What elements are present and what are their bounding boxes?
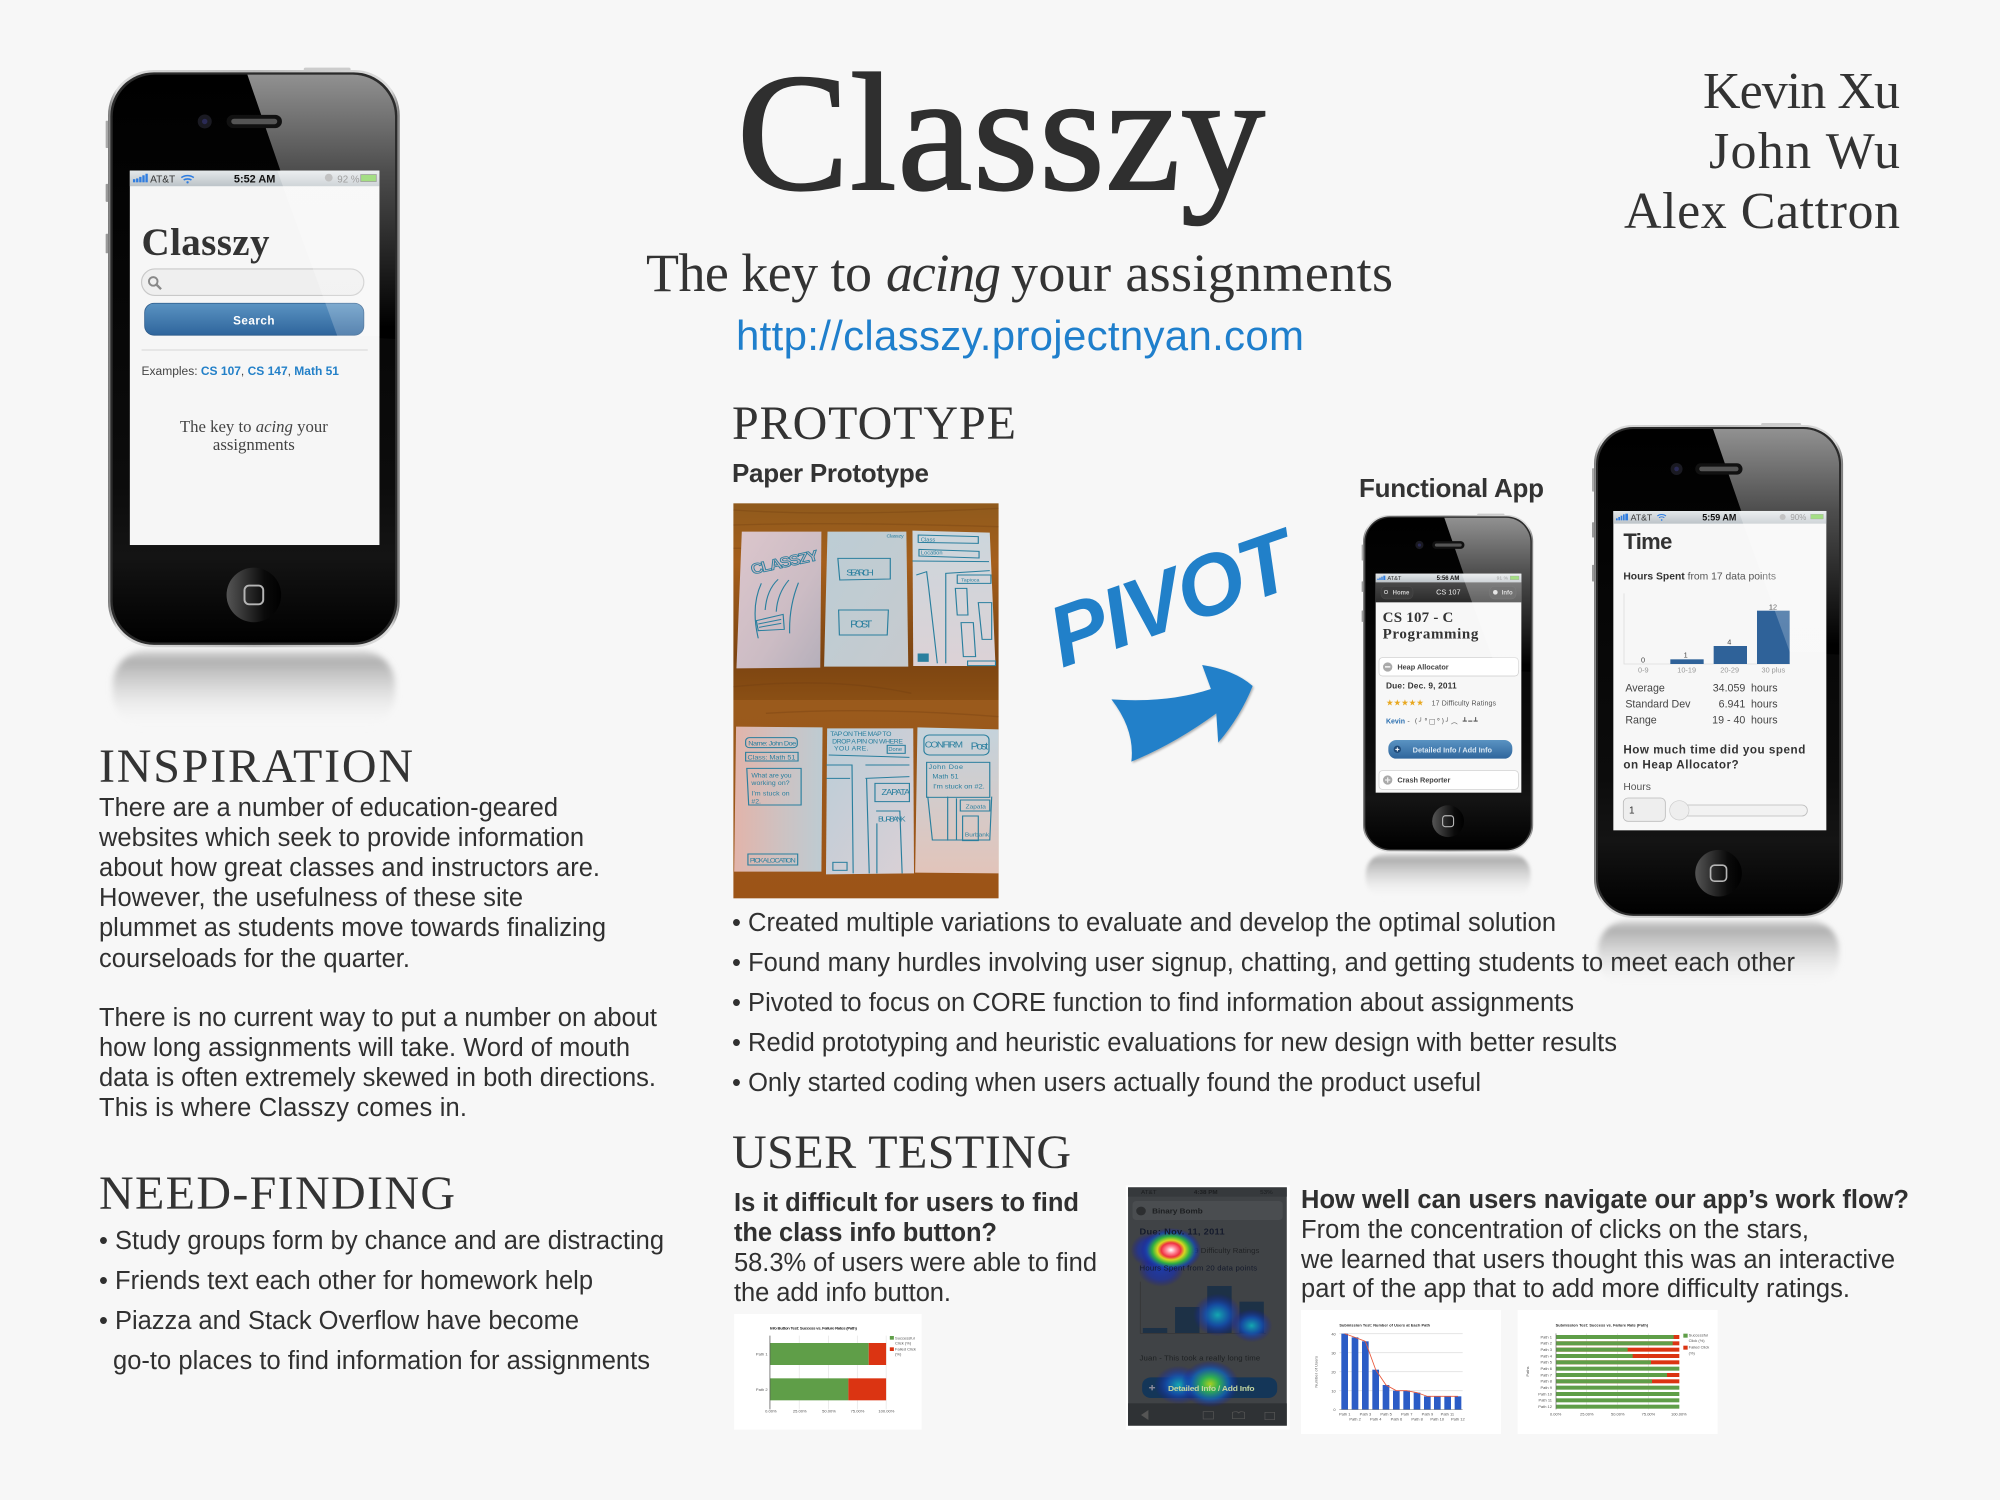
heatmap screenshot — [1126, 1185, 1290, 1430]
comment: Kevin — [1386, 718, 1405, 725]
heading: need-finding: NEED-FINDING — [99, 1167, 455, 1220]
chart: info button test: Path 1 — [756, 1352, 768, 1357]
nav bar — [1376, 582, 1521, 602]
stats table: 19 - 40 — [1712, 715, 1745, 727]
photo: paper prototype sketches: CLASSZY — [749, 548, 821, 578]
photo: paper prototype sketches: PICK A LOCATION — [750, 858, 796, 864]
photo: paper prototype sketches: Classzy — [886, 534, 904, 540]
home tagline — [180, 417, 328, 454]
chart: users at each path: Path 9 — [1422, 1412, 1434, 1417]
photo: paper prototype sketches: Math 51 — [932, 774, 959, 781]
chart: success vs failure per path: Failed Click — [1689, 1345, 1709, 1350]
chart: users at each path: Path 7 — [1401, 1412, 1413, 1417]
chart: success vs failure per path: Path 8 — [1540, 1379, 1553, 1384]
subheading: functional app: Functional App — [1359, 473, 1544, 503]
bullet list: need-finding: • Friends text each other for homework help — [99, 1267, 593, 1295]
chart: users at each path: Path 10 — [1430, 1417, 1445, 1422]
text block: workflow question: How well can users navigate our app’s work flow? — [1301, 1186, 1909, 1214]
question — [1623, 743, 1805, 771]
photo: paper prototype sketches: Class — [921, 538, 936, 543]
bar chart: hours spent: 0-9 — [1638, 665, 1649, 674]
bar chart: hours spent: 0 — [1641, 656, 1645, 665]
screen: search page: 92 % — [337, 174, 360, 185]
heading: prototype: PROTOTYPE — [732, 397, 1016, 450]
chart: users at each path: Path 3 — [1360, 1412, 1372, 1417]
heat spots — [1131, 1227, 1272, 1407]
chart: success vs failure per path: 75.00% — [1642, 1411, 1656, 1416]
screen: course page: 91 % — [1497, 576, 1509, 582]
chart: success vs failure per path: Path 5 — [1540, 1360, 1553, 1365]
stats table — [1625, 683, 1778, 727]
bullet list: prototype: • Created multiple variations to evaluate and develop the optimal solution — [732, 909, 1556, 937]
stats table: 34.059 — [1713, 683, 1745, 695]
chart: success vs failure per path: Successful — [1689, 1333, 1708, 1338]
chart: info button test: Path 2 — [756, 1387, 768, 1392]
chart: users at each path: Path 11 — [1441, 1412, 1455, 1417]
photo: paper prototype sketches: I'm stuck on #2. — [933, 783, 985, 791]
crash reporter card — [1379, 771, 1518, 789]
chart: success vs failure per path: Path 7 — [1540, 1372, 1553, 1377]
stats table: hours — [1751, 683, 1778, 695]
photo: paper prototype sketches: Location — [921, 551, 943, 557]
heading: user testing: USER TESTING — [732, 1126, 1071, 1179]
bullet list: prototype: • Only started coding when users actually found the product useful — [732, 1069, 1481, 1097]
chart: users at each path — [1301, 1310, 1501, 1434]
chart: info button test: Info Button Test: Success vs. Failure Rates (Path) — [770, 1326, 858, 1331]
photo: paper prototype sketches: Name: John Doe — [748, 741, 796, 747]
chart: info button test: 50.00% — [822, 1409, 836, 1414]
page title: Time — [1623, 529, 1672, 554]
photo: paper prototype sketches: POST — [850, 619, 873, 630]
photo: paper prototype sketches: SEARCH — [846, 568, 874, 578]
panel: need-finding — [99, 1167, 664, 1375]
question: How much time did you spend — [1623, 743, 1805, 756]
photo: paper prototype sketches: #2. — [751, 799, 761, 805]
search button — [145, 303, 364, 335]
course title: CS 107 - C — [1383, 610, 1453, 626]
text block: workflow question — [1300, 1186, 1909, 1303]
photo: paper prototype sketches: Done — [888, 747, 902, 753]
heat spots: Detailed Info / Add Info — [1168, 1384, 1255, 1393]
photo: paper prototype sketches: CONFIRM — [925, 740, 963, 749]
heatmap screenshot: 53% — [1260, 1190, 1273, 1196]
comment — [1386, 716, 1478, 725]
chart: success vs failure per path: Path 2 — [1540, 1341, 1553, 1346]
url link: http://classzy.projectnyan.com — [736, 312, 1304, 359]
panel: inspiration — [98, 740, 657, 1122]
add info button — [1388, 740, 1512, 759]
bar chart: hours spent — [1624, 593, 1790, 674]
bar chart: hours spent: 20-29 — [1720, 665, 1739, 674]
photo: paper prototype sketches: Burbank — [965, 832, 990, 839]
chart: users at each path: Submission Test: Number of Users at Each Path — [1339, 1324, 1431, 1328]
hours slider: Hours — [1623, 782, 1651, 793]
text block: info button question: the class info button? — [734, 1219, 997, 1247]
rating stars — [1386, 698, 1496, 708]
heat spots: Due: Nov. 11, 2011 — [1140, 1227, 1225, 1237]
chart: info button test: 100.00% — [878, 1409, 895, 1414]
photo: paper prototype sketches — [733, 503, 999, 898]
screen: search page: AT&T — [150, 174, 175, 185]
chart: users at each path: 10 — [1331, 1388, 1337, 1393]
rating stars: 17 Difficulty Ratings — [1432, 701, 1496, 708]
search field — [142, 269, 364, 295]
chart: users at each path: 30 — [1331, 1350, 1337, 1355]
authors — [1624, 63, 1900, 240]
chart: success vs failure per path: Path 1 — [1540, 1334, 1553, 1339]
text block: info button question: the add info button. — [734, 1279, 951, 1307]
screen: time page — [1613, 511, 1826, 830]
subheading: paper prototype: Paper Prototype — [732, 458, 929, 488]
chart: users at each path: 20 — [1331, 1369, 1337, 1374]
crash reporter card: Crash Reporter — [1397, 776, 1450, 785]
chart: success vs failure per path: 25.00% — [1580, 1411, 1594, 1416]
assignment card: Heap Allocator — [1397, 662, 1449, 671]
authors: Alex Cattron — [1624, 183, 1900, 240]
heat spots: Hours Spent from 20 data points — [1140, 1264, 1258, 1273]
photo: paper prototype sketches: TAP ON THE MAP TO — [830, 731, 891, 738]
title: Classzy — [737, 40, 1265, 226]
chart: users at each path: Path 4 — [1370, 1417, 1382, 1422]
stats table: Average — [1625, 683, 1665, 695]
heading: inspiration: INSPIRATION — [99, 740, 413, 793]
photo: paper prototype sketches: John Doe — [929, 764, 963, 771]
callout: pivot label: PIVOT — [1037, 510, 1312, 686]
phone: course page — [1362, 514, 1533, 899]
text block: inspiration body: There are a number of education-geared — [99, 794, 558, 822]
photo: paper prototype sketches: I'm stuck on — [751, 791, 790, 798]
chart: success vs failure per path: Path 11 — [1539, 1398, 1553, 1403]
arrow: pivot — [1111, 665, 1253, 762]
home tagline: The key to acing your — [180, 417, 328, 436]
chart: users at each path: Path 8 — [1411, 1417, 1424, 1422]
authors: Kevin Xu — [1703, 63, 1900, 120]
screen: time page: AT&T — [1631, 512, 1653, 522]
chart: success vs failure per path — [1518, 1310, 1718, 1434]
chart: success vs failure per path: Path 10 — [1538, 1391, 1553, 1396]
bar chart: hours spent: 12 — [1769, 603, 1777, 612]
comment: - (╯°□°)╯︵ ┻━┻ — [1407, 716, 1478, 725]
chart: success vs failure per path: Path 3 — [1540, 1347, 1553, 1352]
bullet list: prototype: • Pivoted to focus on CORE function to find information about assignments — [732, 989, 1574, 1017]
chart: users at each path: Path 2 — [1349, 1417, 1362, 1422]
photo: paper prototype sketches: working on? — [750, 780, 790, 787]
text block: inspiration body: websites which seek to provide information — [98, 824, 584, 852]
text block: info button question — [734, 1189, 1097, 1307]
home tagline: assignments — [213, 435, 295, 454]
bar chart: hours spent: 4 — [1727, 638, 1731, 647]
chart: success vs failure per path: Path 12 — [1538, 1404, 1553, 1409]
chart: users at each path: 40 — [1331, 1331, 1337, 1336]
course title — [1383, 610, 1479, 643]
nav bar: Home — [1393, 591, 1410, 597]
chart: success vs failure per path: Click (%) — [1689, 1338, 1705, 1343]
text block: info button question: Is it difficult for users to find — [734, 1189, 1079, 1217]
chart: success vs failure per path: 0.00% — [1550, 1411, 1562, 1416]
stats table: hours — [1751, 699, 1778, 711]
chart: info button test: Successful — [895, 1336, 915, 1340]
text block: inspiration body — [98, 794, 657, 1122]
text block: inspiration body: how long assignments will take. Word of mouth — [99, 1034, 630, 1062]
chart: success vs failure per path: (%) — [1689, 1350, 1696, 1355]
rating stars: ★★★★★ — [1386, 698, 1424, 708]
chart: users at each path: 0 — [1333, 1407, 1336, 1412]
bullet list: need-finding: • Piazza and Stack Overflow have become — [99, 1307, 579, 1335]
chart: success vs failure per path: Path 9 — [1540, 1385, 1553, 1390]
add info button: Detailed Info / Add Info — [1413, 745, 1493, 754]
chart: info button test: Click (%) — [895, 1341, 912, 1345]
photo: paper prototype sketches: Post — [971, 741, 988, 752]
heatmap screenshot: 19 Difficulty Ratings — [1190, 1246, 1260, 1255]
bullet list: need-finding: go-to places to find information for assignments — [113, 1347, 650, 1375]
chart: info button test — [734, 1314, 922, 1430]
stats table: 6.941 — [1719, 699, 1745, 711]
bar chart: hours spent: 30 plus — [1762, 665, 1785, 674]
examples line: Examples: — [142, 364, 201, 378]
nav bar: CS 107 — [1436, 588, 1461, 597]
nav bar: Info — [1502, 591, 1513, 597]
text block: inspiration body: However, the usefulness of these site — [99, 884, 523, 912]
chart: info button test: 75.00% — [851, 1409, 865, 1414]
assignment card — [1379, 658, 1518, 676]
bullet list: need-finding — [99, 1227, 664, 1375]
tagline: acing — [886, 243, 1001, 303]
tagline: The key to — [646, 243, 872, 303]
chart: success vs failure per path: Path 6 — [1540, 1366, 1553, 1371]
authors: John Wu — [1709, 123, 1900, 180]
chart: info button test: Failed Click — [895, 1347, 916, 1352]
text block: inspiration body: courseloads for the quarter. — [99, 945, 410, 973]
chart: success vs failure per path: Submission Test: Success vs. Failure Rate (Path) — [1556, 1324, 1649, 1328]
bullet list: need-finding: • Study groups form by chance and are distracting — [99, 1227, 664, 1255]
chart: users at each path: Path 6 — [1391, 1417, 1403, 1422]
bullet list: prototype: • Found many hurdles involving user signup, chatting, and getting students to meet each other — [732, 949, 1796, 977]
bar chart: hours spent: 10-19 — [1677, 665, 1696, 674]
photo: paper prototype sketches: Tapioca — [961, 578, 980, 583]
heatmap screenshot: 4:38 PM — [1194, 1190, 1218, 1196]
chart: info button test: 0.00% — [765, 1409, 777, 1414]
stats table: Standard Dev — [1625, 699, 1691, 711]
photo: paper prototype sketches: Class: Math 51 — [748, 755, 796, 761]
text block: inspiration body: plummet as students move towards finalizing — [99, 914, 606, 942]
stats table: Range — [1625, 715, 1657, 727]
photo: paper prototype sketches: DROP A PIN ON WHERE — [832, 739, 904, 745]
text block: inspiration body: This is where Classzy comes in. — [99, 1094, 467, 1122]
stats table: hours — [1751, 715, 1778, 727]
screen: search page: 5:52 AM — [234, 173, 275, 185]
heatmap screenshot: Binary Bomb — [1152, 1207, 1203, 1216]
app title: Classzy — [142, 221, 270, 264]
phone: time page — [1592, 423, 1843, 987]
photo: paper prototype sketches: ZAPATA — [881, 788, 910, 797]
tagline: your assignments — [1011, 243, 1393, 303]
bullet list: prototype: • Redid prototyping and heuristic evaluations for new design with better results — [732, 1029, 1617, 1057]
chart: info button test: 25.00% — [793, 1409, 807, 1414]
screen: course page: AT&T — [1387, 576, 1402, 582]
text block: workflow question: part of the app that to add more difficulty ratings. — [1301, 1275, 1850, 1303]
search button: Search — [233, 314, 275, 327]
hours slider: 1 — [1629, 805, 1635, 816]
bar chart: hours spent: 1 — [1684, 651, 1688, 660]
tagline — [646, 243, 1393, 303]
screen: course page: 5:56 AM — [1437, 576, 1459, 582]
screen: time page: 5:59 AM — [1702, 512, 1736, 522]
text block: workflow question: From the concentration of clicks on the stars, — [1301, 1216, 1809, 1244]
text block: inspiration body: There is no current way to put a number on about — [99, 1004, 657, 1032]
photo: paper prototype sketches: Zapata — [966, 804, 987, 811]
examples line: CS 107, CS 147, Math 51 — [201, 364, 339, 378]
chart: info button test: (%) — [895, 1352, 902, 1356]
photo: paper prototype sketches: What are you — [751, 773, 792, 779]
text block: inspiration body: data is often extremely skewed in both directions. — [99, 1064, 656, 1092]
heatmap screenshot: AT&T — [1141, 1190, 1157, 1196]
chart heading: Hours Spent from 17 data points — [1623, 572, 1776, 583]
heatmap screenshot: Juan - This took a really long time — [1140, 1354, 1260, 1363]
course title: Programming — [1383, 627, 1479, 643]
question: on Heap Allocator? — [1623, 758, 1739, 771]
text block: inspiration body: about how great classes and instructors are. — [99, 854, 600, 882]
text block: workflow question: we learned that users thought this was an interactive — [1300, 1246, 1895, 1274]
screen: time page: 90% — [1790, 513, 1806, 522]
photo: paper prototype sketches: BURBANK — [878, 815, 906, 824]
screen: course page — [1376, 574, 1521, 793]
chart: users at each path: Path 5 — [1380, 1412, 1393, 1417]
chart: success vs failure per path: 100.00% — [1671, 1411, 1687, 1416]
chart: success vs failure per path: Paths — [1525, 1366, 1530, 1377]
due date: Due: Dec. 9, 2011 — [1386, 681, 1457, 691]
photo: paper prototype sketches: YOU ARE. — [834, 746, 869, 753]
chart: success vs failure per path: 50.00% — [1611, 1411, 1625, 1416]
screen: search page — [130, 171, 379, 545]
chart: users at each path: Path 12 — [1451, 1417, 1466, 1422]
hours slider — [1623, 782, 1807, 821]
chart: success vs failure per path: Path 4 — [1540, 1353, 1553, 1358]
text block: info button question: 58.3% of users were able to find — [734, 1249, 1097, 1277]
chart: users at each path: Number of Users — [1314, 1356, 1319, 1388]
chart: users at each path: Path 1 — [1339, 1412, 1351, 1417]
phone: home screen — [106, 68, 400, 728]
bullet list: prototype — [732, 909, 1796, 1097]
